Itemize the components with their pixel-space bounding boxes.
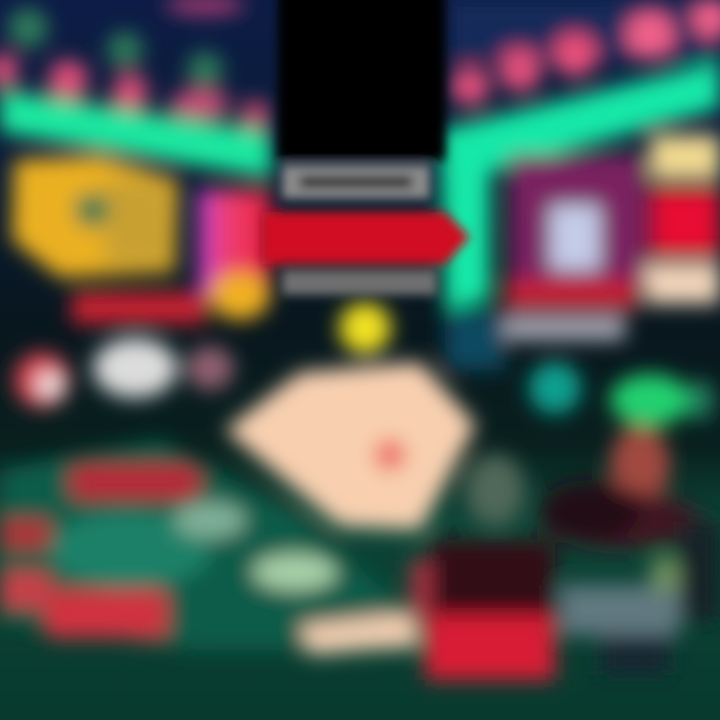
header block: [262, 0, 470, 295]
dark right mid: [540, 480, 640, 540]
left icon row: [14, 338, 234, 408]
pink panel: [198, 190, 270, 300]
teal circle: [529, 362, 581, 414]
stripes right: [645, 135, 720, 304]
top left lights: [0, 0, 270, 130]
lighter felt: [50, 512, 210, 588]
gray machine: [560, 555, 680, 675]
orange dot: [210, 272, 270, 320]
small figure: [465, 454, 525, 526]
teal glow right: [445, 310, 505, 370]
green table: [0, 440, 420, 650]
red spot: [374, 439, 406, 471]
red chips: [0, 465, 200, 638]
purple panel: [510, 155, 645, 285]
title text smudge: [300, 176, 412, 188]
yellow circle: [339, 302, 391, 354]
person: [540, 374, 714, 548]
top right lights: [450, 0, 720, 106]
black rectangle: [278, 0, 445, 160]
red arrow: [262, 212, 470, 264]
gray label right: [505, 316, 625, 340]
red truck: [410, 540, 555, 680]
neon band left: [0, 90, 272, 178]
red label left: [72, 292, 207, 324]
dark bottom right: [680, 520, 720, 620]
gray title band: [282, 165, 430, 199]
pale labels: [174, 502, 420, 655]
red label right: [506, 280, 638, 310]
peach diamond: [225, 362, 476, 530]
neon band right: [440, 62, 720, 310]
gray subtitle band: [282, 270, 437, 295]
yellow panel: [12, 155, 178, 278]
